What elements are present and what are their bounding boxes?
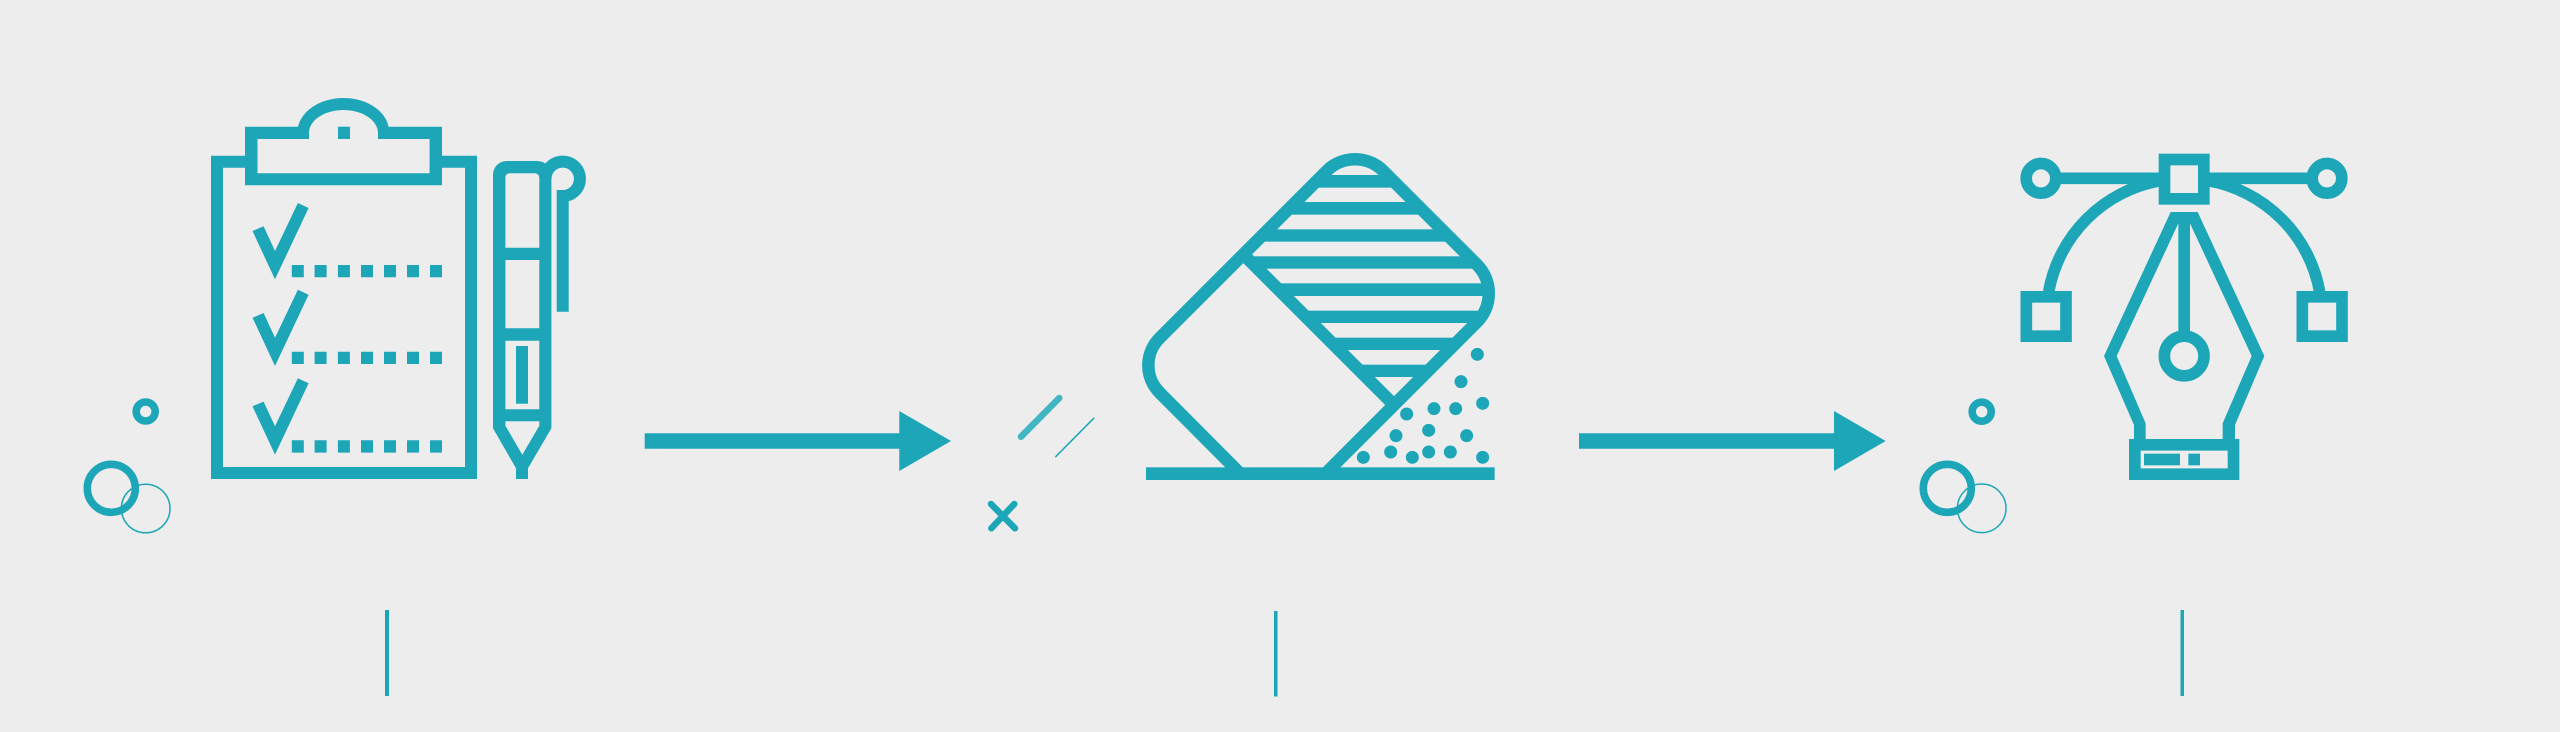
icon: small and large rings, left	[87, 402, 170, 533]
icon: vector pen tool	[2026, 159, 2342, 480]
checklist row 3	[252, 378, 442, 455]
icon: eraser	[1146, 159, 1497, 480]
vertical line: second column	[1274, 611, 1278, 696]
vertical line: third column	[2180, 610, 2184, 696]
checklist row 2	[252, 290, 442, 366]
icon: clipboard with checklist	[211, 98, 477, 479]
clip hole	[338, 127, 350, 139]
eraser crumbs	[1357, 348, 1489, 464]
icon: pen	[493, 161, 580, 479]
checklist row 1	[252, 203, 442, 279]
eraser baseline	[1146, 467, 1495, 480]
vertical line: first column	[385, 610, 389, 696]
clipboard clip	[245, 98, 442, 185]
icon: small and large rings, right	[1923, 402, 2006, 533]
arrow: second	[1579, 411, 1886, 471]
eraser outline	[1148, 159, 1489, 474]
eraser stripes	[1254, 175, 1483, 377]
pen base	[2129, 439, 2239, 480]
clipboard board	[211, 156, 477, 479]
bezier handles and curves	[2026, 159, 2342, 336]
arrow: first	[645, 411, 951, 471]
icon: dashes and cross marks	[991, 398, 1094, 528]
pen nib	[2104, 212, 2264, 443]
